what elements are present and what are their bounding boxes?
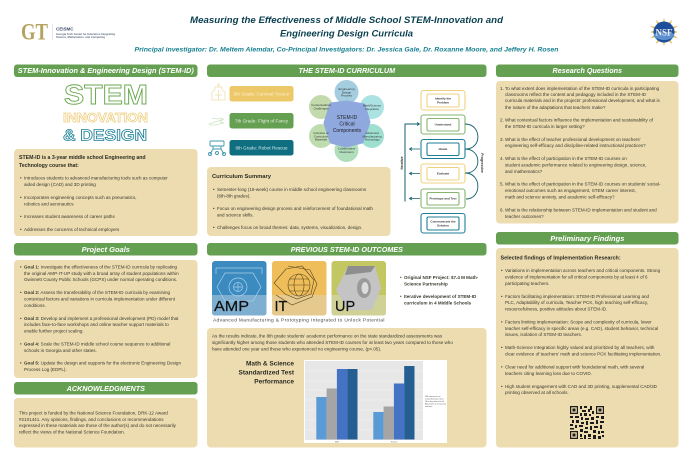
questions list: 1. [500, 86, 504, 91]
logo: Georgia Tech CEISMC [21, 20, 115, 44]
results text: significantly higher among those students who attended STEM-ID courses for at least two years compared to those who [212, 340, 453, 345]
questions list: emotional outcomes such as engagement, STEM career interest, [505, 188, 636, 193]
step: prototype and test [421, 189, 465, 208]
section header: Previous Outcomes: PREVIOUS STEM-ID OUTCOMES [291, 245, 403, 254]
findings list: Factors facilitating implementation: STEM-ID Professional Learning and [505, 294, 650, 299]
acknowledgment text: expressed in these materials are those of the author(s) and do not necessarily [19, 423, 177, 428]
circle labels: Advanced [365, 131, 379, 135]
goals list: schools in Georgia and other states. [24, 348, 97, 353]
section header: Research Questions: Research Questions [553, 66, 622, 75]
circle labels [311, 87, 382, 154]
goals list: includes face-to-face workshops and online teacher support materials to [24, 322, 169, 327]
results text [212, 334, 453, 352]
bullet list: aided design (CAD) and 3D printing [24, 182, 96, 187]
tile: AMP: AMP [214, 299, 249, 315]
step: communicate the solution: Solution [437, 224, 449, 228]
findings list: Variations in implementation across teachers and critical components. Strong [505, 268, 661, 273]
axis labels: Science [391, 442, 397, 444]
findings list: issues, isolation of STEM-ID teachers. [505, 332, 582, 337]
step: evaluate: Evaluate [437, 172, 449, 176]
central label: STEM-ID [337, 115, 358, 121]
tile: UP [332, 261, 386, 316]
circle labels: Challenges [313, 106, 329, 110]
bullets: original project: Science Partnership [404, 282, 448, 286]
questions list: classrooms reflect the content and pedagogy included in the STEM-ID [505, 92, 647, 97]
circle labels: Inclusive of [313, 131, 329, 135]
panel: Project Goals [14, 260, 198, 378]
axis labels: Math [335, 440, 339, 444]
bullet list: Introduces students to advanced manufacturing tools such as computer [24, 176, 168, 180]
circle labels: Integration [365, 107, 379, 111]
logo: NSF [650, 18, 678, 46]
goals list: Goal 5: Update the design and supports for the electronic Engineering Design [24, 360, 181, 366]
findings list: Factors limiting implementation: Scope and complexity of curricula, lower [505, 320, 652, 324]
diagram: critical components [309, 80, 384, 162]
STEM Innovation & Design wordmark: & DESIGN [63, 128, 147, 144]
findings list [501, 268, 661, 395]
circle labels: Technology [364, 138, 380, 142]
step: identify the problem [421, 90, 465, 110]
section header: Preliminary Findings: Preliminary Findings [550, 234, 624, 243]
circle labels: Math/Science [363, 104, 381, 108]
findings list: • [501, 345, 503, 350]
section header: The STEM-ID Curriculum [207, 64, 486, 77]
goals list: the original AMP-IT-UP study with a broad array of student populations within [24, 271, 179, 276]
section header: Project Goals [14, 243, 198, 256]
legend: school learning: exam [425, 398, 444, 400]
questions list: What contextual factors influence the implementation and sustainability of [505, 118, 654, 122]
section header: Acknowledgments: ACKNOWLEDGMENTS [66, 384, 145, 393]
summary bullets: and science skills. [217, 212, 254, 218]
circle labels: Contextualized [311, 103, 331, 107]
panel: Curriculum Summary [207, 167, 390, 236]
summary bullets: Semester-long (18-week) course in middle school engineering classrooms [217, 187, 367, 192]
legend: What they attend in all [425, 400, 444, 403]
findings list: teacher self-efficacy in specific areas (e.g. CAD), student behavior, technical [505, 326, 658, 331]
summary bullets: Focus on engineering design process and reinforcement of foundational math [217, 206, 373, 211]
questions list: What is the effect of participation in the STEM-ID courses on [505, 156, 627, 161]
icon: robot rescue [208, 141, 226, 156]
bullets: original project: curriculum in 4 Middle Schools [404, 300, 472, 306]
questions list: 6. [500, 208, 504, 212]
goals list: conditions. [24, 303, 46, 308]
circle labels: Design [342, 90, 351, 94]
bullet list: • [20, 214, 22, 219]
axis labels [335, 440, 397, 444]
logo: Georgia Tech CEISMC: Science, Mathematics, and Computing [56, 35, 105, 39]
section header: Project Goals: Project Goals [82, 245, 130, 254]
summary bullets: • [213, 206, 215, 211]
goals list: • [20, 360, 22, 366]
acknowledgment text: #2101441. Any opinions, findings, and conclusions or recommendations [19, 417, 164, 422]
central label: Components [333, 128, 362, 134]
tile: UP: UP [335, 299, 355, 315]
chart title: Performance [254, 378, 294, 386]
tile: AMP [212, 261, 266, 316]
step: communicate the solution [421, 214, 465, 233]
AMP-IT-UP icon set [212, 261, 386, 316]
goals list: Goal 2: Assess the transferability of the STEM-ID curricula by examining [24, 290, 171, 295]
goals list: Goal 4: Scale the STEM-ID middle school course sequence to additional [24, 342, 170, 346]
section header: The STEM-ID Curriculum: THE STEM-ID CURRICULUM [298, 66, 396, 75]
tile: IT [272, 261, 326, 316]
bullet list: • [20, 227, 22, 232]
step: identify the problem: Problem [437, 100, 449, 104]
central blob [325, 102, 369, 146]
arrows: progression [465, 124, 478, 199]
logo: NSF: NSF [655, 28, 673, 38]
central label [333, 115, 362, 134]
bullets: original project: Original NSF Project: $7.4 M Math- [404, 275, 479, 280]
summary bullets: • [213, 225, 215, 230]
panel: STEM-ID description [14, 149, 198, 236]
questions list: teacher outcomes? [505, 214, 544, 219]
icon: flight of fancy [209, 118, 224, 125]
findings list: Clear need for additional support with foundational math, with several [505, 364, 644, 370]
findings list: resourcefulness, positive attitudes about STEM-ID. [505, 306, 607, 312]
findings list: PLC, Adaptability of curricula, Teacher PCK, high teaching self-efficacy, [505, 300, 648, 305]
label: iterative: Iterative [400, 156, 404, 170]
circle labels: Engineering [338, 87, 355, 91]
STEM Innovation & Design wordmark [63, 79, 148, 144]
step: understand [421, 115, 465, 134]
goals list [20, 264, 181, 372]
goals list: • [20, 316, 22, 321]
step: identify the problem: Identify the [435, 96, 451, 100]
caption: AMP-IT-UP: Advanced Manufacturing & Prototyping Integrated to Unlock Potential [213, 318, 384, 324]
findings list: • [501, 294, 503, 299]
arrows: iteration [405, 122, 420, 202]
findings list: teachers citing learning loss due to COVID. [505, 371, 592, 376]
findings list: Math-Science Integration highly valued and prioritized by all teachers, with [505, 345, 655, 350]
step: prototype and test: Prototype and Test [430, 196, 456, 200]
panel: Research Questions [496, 81, 678, 224]
step: evaluate [421, 164, 465, 183]
goals list: • [20, 264, 22, 270]
questions list: 4. [500, 156, 504, 161]
findings list: • [501, 320, 503, 324]
questions list: 5. [500, 182, 504, 186]
chart title: Math & Science [246, 360, 294, 368]
logo: Georgia Tech CEISMC: CEISMC [56, 26, 74, 32]
questions list [500, 86, 661, 219]
QR code [570, 406, 604, 439]
questions list: the STEM-ID curricula in larger setting? [505, 124, 585, 129]
acknowledgment text: This project is funded by the National Science Foundation, DRK-12 Award [19, 410, 168, 416]
goals list: • [20, 342, 22, 346]
section header: Preliminary Findings [496, 232, 678, 244]
questions list: engineering self-efficacy and discipline-related instructional practices? [505, 143, 646, 148]
group one bars [316, 369, 358, 440]
circle labels: Collaborative [338, 146, 356, 150]
bullet list: • [20, 176, 22, 180]
results text: As the results indicate, the 8th grade students' academic performance on the state standardized assessments was [212, 334, 443, 338]
questions list: math and science anxiety, and academic self-efficacy? [505, 194, 615, 200]
findings list: • [501, 384, 503, 389]
questions list: and mathematics? [505, 169, 543, 174]
goals list: Gwinnett County Public Schools (GCPS) under normal operating conditions. [24, 277, 177, 282]
circle labels: Classroom [339, 150, 354, 154]
panel: results [207, 328, 486, 448]
bullet list: • [20, 195, 22, 200]
findings list: clear evidence of teachers' math and science PCK facilitating implementation. [505, 352, 661, 356]
step: communicate the solution: Communicate the [430, 220, 456, 224]
bullets: original project: Iterative development of STEM-ID [404, 294, 477, 299]
title [190, 15, 504, 40]
icon: carnival tycoon [212, 84, 225, 100]
findings list: • [501, 268, 503, 273]
questions list: What is the effect of participation in the STEM-ID courses on students' social- [505, 182, 661, 186]
bar chart [304, 360, 447, 444]
summary bullets [213, 187, 373, 230]
legend: Still experience no [425, 395, 440, 398]
investigators line: Principal investigator: Dr. Meltem Alemdar, Co-Principal Investigators: Dr. Jessica Gale, Dr. Roxanne Moore, and Jeffery H. Rosen [134, 46, 558, 54]
group two bars [373, 366, 414, 440]
questions list: To what extent does implementation of the STEM-ID curricula in participating [505, 86, 660, 91]
central label: Critical [339, 122, 355, 128]
tile: IT: IT [274, 299, 288, 315]
findings list: High student engagement with CAD and 3D printing, supplemental CAD/3D [505, 384, 658, 389]
chart title: Standardized Test [238, 370, 295, 376]
pill: 7th grade: 7th Grade: Flight of Fancy [235, 118, 289, 124]
circle labels: Materials [315, 138, 328, 142]
step: understand: Understand [435, 122, 452, 126]
section header: Acknowledgments [14, 382, 198, 394]
questions list: What is the relationship between STEM-ID implementation and student and [505, 208, 657, 212]
flow diagram: engineering design process [400, 90, 484, 233]
STEM Innovation & Design wordmark: INNOVATION [63, 110, 148, 125]
goals list: Process Log (EDPL). [24, 367, 67, 372]
panel heading: STEM-ID is a 3-year middle school Engineering and [19, 155, 146, 161]
goals list: enable further project scaling. [24, 328, 84, 334]
questions list: 2. [500, 118, 504, 122]
section header: STEM-ID [14, 64, 198, 77]
bullets: original project [400, 275, 479, 306]
bullets: original project: • [400, 275, 402, 280]
circle labels: Process [341, 94, 352, 98]
panel: Preliminary Findings [496, 248, 678, 448]
chart title [238, 360, 295, 386]
section header: Previous Outcomes [207, 243, 486, 256]
circle labels: Curriculum [314, 134, 329, 138]
section header: Research Questions [496, 64, 678, 77]
bullets: original project: • [400, 294, 402, 299]
goals list: contextual factors and variations in curricula implementation under different [24, 296, 176, 302]
goals list: Goal 1: Investigate the effectiveness of the STEM-ID curricula by replicating [24, 264, 178, 270]
legend: and later [425, 405, 433, 408]
findings list: evidence of implementation for all critical components by at least 4 of 6 [505, 274, 648, 280]
pill: 8th grade: 8th Grade: Robot Rescue [235, 146, 288, 150]
bullet list: Increases student awareness of career paths [24, 214, 115, 219]
pill: 6th grade: 6th Grade: Carnival Tycoon [234, 92, 290, 96]
bullet list [20, 176, 168, 232]
bullet list: Addresses the concerns of technical employers [24, 227, 120, 232]
questions list: student academic performance related to engineering design, science, [505, 162, 647, 168]
step: ideate: Ideate [439, 147, 448, 151]
grade rows [208, 84, 294, 156]
legend: Attend two or more years [425, 402, 446, 406]
outer circles [309, 80, 384, 162]
summary heading: Curriculum Summary [212, 174, 272, 180]
acknowledgment text: reflect the views of the National Science Foundation. [19, 430, 125, 434]
STEM Innovation & Design wordmark: STEM [64, 79, 148, 110]
legend [425, 395, 446, 408]
questions list: the nature of the adaptations that teachers make? [505, 105, 606, 110]
questions list: What is the effect of teacher professional development on teachers' [505, 137, 641, 142]
questions list: curricula materials and in the projects' professional development, and what is [505, 98, 661, 103]
questions list: 3. [500, 137, 504, 142]
findings list: • [501, 364, 503, 370]
bullet list: robotics and aeronautics [24, 202, 74, 206]
findings heading: Selected findings of Implementation Research: [500, 256, 621, 262]
logo: Georgia Tech CEISMC: Georgia Tech Center for Education Integrating [56, 32, 115, 36]
acknowledgment text [19, 410, 177, 434]
summary bullets: (6th-8th grades). [217, 194, 251, 198]
bullet list: Incorporates engineering concepts such as pneumatics, [24, 195, 136, 200]
label: progressive: Progressive [480, 153, 484, 173]
findings list: participating teachers. [505, 281, 549, 286]
circle labels: Manufacturing [362, 134, 382, 138]
goals list: Goal 3: Develop and implement a professional development (PD) model that [24, 316, 179, 321]
section header: STEM-ID: STEM-Innovation & Engineering Design (STEM-ID) [18, 68, 194, 75]
findings list: printing observed at all schools. [505, 390, 569, 395]
summary bullets: • [213, 187, 215, 192]
goals list: • [20, 290, 22, 295]
title: Measuring the Effectiveness of Middle School STEM-Innovation and [190, 15, 504, 26]
panel heading [19, 155, 146, 169]
title: Engineering Design Curricula [280, 28, 414, 40]
panel: Acknowledgments [14, 398, 198, 448]
step: ideate [421, 140, 465, 158]
logo: Georgia Tech CEISMC: GT [21, 20, 48, 44]
results text: have attended one year and those who experienced no engineering course, (p<.05). [212, 346, 381, 352]
panel heading: Technology course that: [19, 163, 79, 169]
summary bullets: Challenges focus on broad themes: data, systems, visualization, design. [217, 225, 362, 230]
